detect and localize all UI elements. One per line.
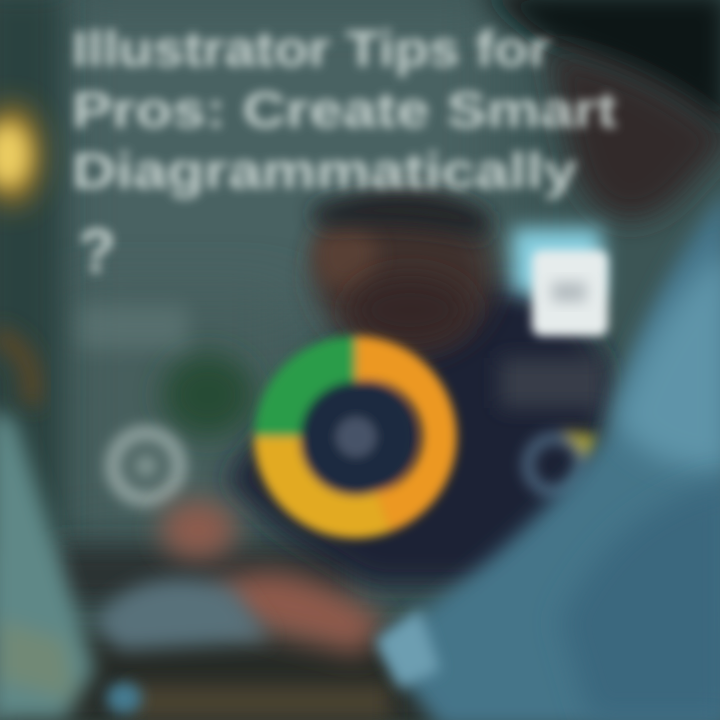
foreground person: shirt — [375, 190, 720, 720]
title text, blurred: Pros: Create Smart — [72, 82, 617, 138]
title text, blurred: ? — [78, 217, 116, 286]
small blue object bottom — [106, 682, 142, 714]
donut chart — [254, 336, 457, 538]
green segment — [254, 336, 356, 437]
small ring icon, right — [528, 430, 598, 492]
person in background: head — [310, 194, 495, 355]
left plant stem — [0, 335, 32, 405]
title text, blurred: Illustrator Tips for — [72, 21, 550, 77]
hands on keyboard — [160, 500, 385, 655]
person in background: torso — [225, 280, 610, 585]
foreground person: hair — [480, 0, 720, 140]
yellow segment — [254, 437, 390, 538]
gear icon, left — [113, 433, 179, 499]
background plant — [162, 353, 254, 437]
white document icon — [512, 228, 608, 336]
foreground person: face — [545, 50, 720, 220]
lamp glow at left — [0, 103, 42, 207]
title text, blurred — [72, 21, 617, 286]
title text, blurred: Diagrammatically — [72, 143, 577, 199]
laptop — [0, 410, 270, 720]
orange segment — [356, 336, 457, 532]
faint caption text — [78, 305, 188, 350]
small panel on jacket — [500, 358, 605, 408]
